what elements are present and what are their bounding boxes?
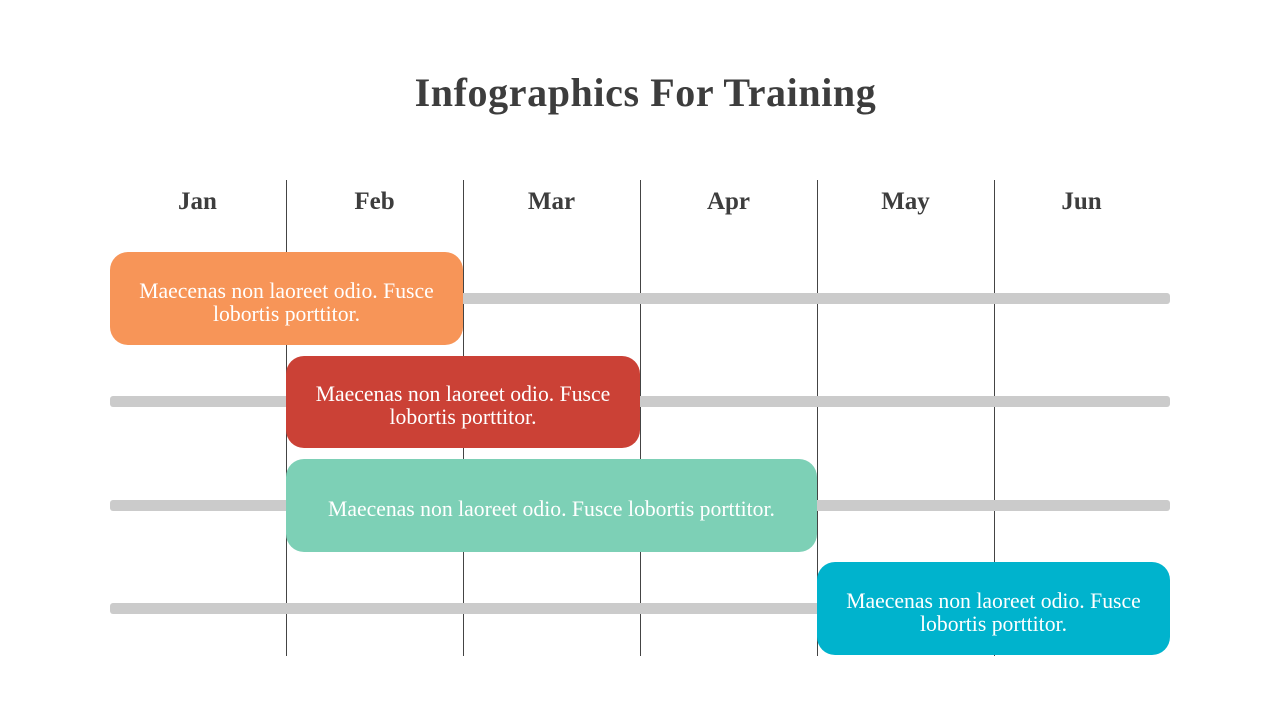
month: Mar: Mar — [528, 188, 575, 215]
task bar: blue: Maecenas non laoreet odio. Fusce lobortis porttitor. — [846, 588, 1141, 636]
month: Apr: Apr — [707, 188, 750, 215]
task bar: green: Maecenas non laoreet odio. Fusce lobortis porttitor. — [328, 497, 775, 521]
month: Jun: Jun — [1061, 188, 1102, 215]
task bar: green — [286, 459, 817, 552]
month: May: May — [881, 188, 930, 215]
title: Infographics For Training — [415, 70, 876, 115]
task bar: blue — [817, 562, 1170, 655]
task bar: orange: Maecenas non laoreet odio. Fusce lobortis porttitor. — [139, 278, 434, 326]
track: row 4 — [110, 603, 820, 614]
month: Feb: Feb — [354, 188, 395, 215]
month: Jan: Jan — [178, 188, 217, 215]
track: row 3 — [110, 500, 1170, 511]
task bar: red — [286, 356, 640, 448]
task bar: orange — [110, 252, 463, 345]
track: row 1 — [460, 293, 1170, 304]
task bar: red: Maecenas non laoreet odio. Fusce lobortis porttitor. — [316, 382, 610, 429]
track: row 2 — [110, 396, 1170, 407]
